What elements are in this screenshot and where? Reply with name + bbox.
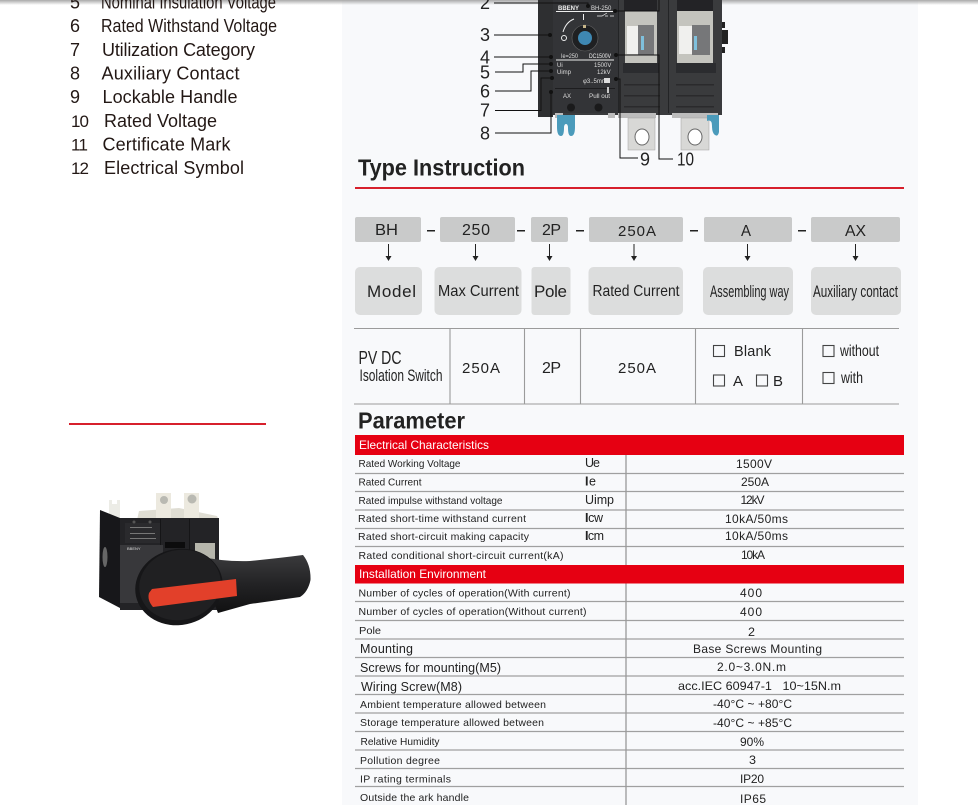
heading: Type Instruction: Type Instruction [358, 154, 525, 180]
front label plate: Ie=250 [561, 54, 579, 60]
panel: right column background [342, 0, 918, 805]
list: component legend: Rated Withstand Voltage [101, 16, 277, 36]
list: component legend: 6 [70, 16, 80, 36]
rows: installation environment: Base Screws Mounting [693, 642, 822, 656]
front label plate: DC1500V [589, 54, 611, 60]
callout numbers: 8 [480, 124, 490, 144]
diagram: labelled switch front view [480, 0, 728, 170]
rows: electrical characteristics [358, 456, 788, 562]
divider: red rule under heading [355, 187, 904, 189]
rows: installation environment: Outside the ark handle [360, 792, 469, 804]
callout numbers: 6 [480, 82, 490, 102]
front label plate: Ui [557, 63, 563, 69]
list: component legend: Electrical Symbol [104, 158, 244, 178]
rows: installation environment: Mounting [360, 642, 413, 656]
rows: installation environment: -40°C ~ +85°C [713, 716, 792, 730]
list: component legend: 10 [71, 112, 89, 131]
front label plate: 12kV [597, 70, 611, 76]
rows: installation environment: Number of cycles of operation(With current) [358, 588, 570, 600]
callout numbers: 9 [640, 150, 650, 170]
model code boxes [355, 217, 900, 242]
rows: installation environment: 3 [749, 753, 756, 767]
rows: electrical characteristics: 12kV [740, 493, 764, 507]
front label plate: BBENY [558, 6, 579, 12]
header: Installation Environment: Installation Environment [359, 567, 487, 581]
model code boxes: BH [375, 222, 398, 239]
rows: installation environment: Relative Humidity [360, 736, 440, 748]
meaning boxes: Max Current [438, 283, 520, 300]
meaning boxes: Pole [534, 282, 567, 301]
header: Installation Environment [355, 565, 904, 584]
list: component legend: Certificate Mark [102, 134, 232, 154]
selection table: 2P [542, 360, 561, 377]
selection table: without [839, 343, 879, 360]
rows: electrical characteristics: 10kA/50ms [725, 529, 788, 543]
selection table: with [840, 370, 863, 387]
rows: installation environment: 400 [740, 586, 762, 600]
list: component legend: 12 [71, 159, 89, 178]
callout numbers [480, 0, 694, 170]
rows: electrical characteristics: Icm [585, 529, 604, 543]
list: component legend: Utilization Category [102, 40, 255, 60]
callout numbers: 7 [480, 100, 490, 120]
model code boxes: 250 [462, 222, 490, 239]
selection table: 250A [618, 360, 656, 377]
rows: installation environment: Pole [359, 625, 381, 637]
list: component legend: Auxiliary Contact [102, 64, 240, 84]
handle [128, 541, 311, 633]
divider: left red rule [69, 423, 266, 425]
dashes between code boxes [427, 230, 806, 232]
callout numbers: 5 [480, 62, 490, 82]
front label plate: φ3..5mm [583, 79, 607, 85]
rows: installation environment: acc.IEC 60947-1 10~15N.m [678, 679, 841, 693]
rows: electrical characteristics: Ie [585, 474, 596, 488]
list: component legend: 7 [70, 40, 80, 60]
model code boxes: 2P [542, 222, 561, 239]
list: component legend: Lockable Handle [102, 87, 238, 107]
rows: installation environment: Ambient temperature allowed between [360, 699, 546, 711]
list: component legend: 9 [70, 87, 80, 107]
front label plate: 1500V [594, 63, 611, 69]
rows: installation environment: 2 [748, 625, 755, 639]
callout leader lines [494, 0, 673, 159]
heading: Parameter: Parameter [358, 408, 465, 434]
rows: electrical characteristics: 10kA [741, 548, 765, 562]
callout numbers: 4 [480, 48, 490, 68]
callout numbers: 3 [480, 25, 490, 45]
rows: installation environment: IP20 [740, 772, 764, 786]
selection table: PV DC [358, 348, 402, 368]
meaning boxes [355, 267, 901, 315]
rows: installation environment: Screws for mounting(M5) [360, 661, 501, 675]
list: component legend: 11 [71, 136, 88, 154]
rows: installation environment: IP rating terminals [360, 774, 451, 786]
front label plate [555, 6, 615, 112]
rows: installation environment: Storage temperature allowed between [360, 717, 544, 729]
rows: installation environment: Number of cycles of operation(Without current) [358, 606, 586, 618]
rows: electrical characteristics: 250A [741, 475, 769, 489]
parameter table [355, 435, 904, 805]
selection table: Blank [734, 344, 772, 360]
image: isolation switch with rotary handle [99, 493, 311, 633]
rows: electrical characteristics: Rated Working Voltage [358, 458, 461, 470]
rows: electrical characteristics: Uimp [585, 493, 614, 507]
list: component legend: Rated Voltage [104, 111, 217, 131]
rows: electrical characteristics: 1500V [736, 457, 772, 471]
rows: installation environment: Wiring Screw(M8) [361, 680, 462, 694]
rows: installation environment: 90% [740, 735, 764, 749]
callout numbers: 10 [677, 150, 694, 170]
image: isolation switch with rotary handle: BBENY [127, 546, 141, 551]
meaning boxes: Auxiliary contact [813, 283, 898, 301]
front label plate: Uimp [557, 70, 572, 76]
selection table: B [773, 374, 783, 390]
front label plate: AX [563, 94, 571, 100]
rows: installation environment: Pollution degree [360, 755, 440, 767]
rows: electrical characteristics: Icw [585, 511, 604, 525]
selection table: 250A [462, 360, 500, 377]
rows: electrical characteristics: Rated Current [358, 476, 422, 488]
model code boxes: A [741, 223, 751, 240]
rows: electrical characteristics: Rated short-time withstand current [358, 513, 526, 525]
list: component legend: 8 [70, 64, 80, 84]
rows: electrical characteristics: 10kA/50ms [725, 512, 788, 526]
callout dots [548, 4, 618, 94]
front label plate: BH-250 [591, 6, 612, 12]
rows: installation environment [358, 586, 841, 805]
selection table [354, 328, 899, 404]
rows: installation environment: 2.0~3.0N.m [717, 660, 786, 674]
front label plate: Pull out [589, 94, 610, 100]
model code boxes: 250A [618, 223, 656, 240]
meaning boxes: Assembling way [710, 283, 789, 301]
rows: electrical characteristics: Ue [585, 456, 600, 470]
rows: installation environment: -40°C ~ +80°C [713, 697, 792, 711]
arrows from code to meaning [386, 244, 858, 261]
rows: electrical characteristics: Rated short-circuit making capacity [358, 531, 530, 543]
rows: electrical characteristics: Rated impulse withstand voltage [358, 495, 503, 507]
model code boxes: AX [845, 223, 866, 240]
header: Electrical Characteristics: Electrical Characteristics [359, 438, 489, 452]
list: component legend [70, 0, 277, 178]
meaning boxes: Rated Current [592, 283, 680, 300]
rows: installation environment: 400 [740, 605, 762, 619]
terminals [557, 115, 719, 150]
selection table: Isolation Switch [360, 367, 442, 385]
header: Electrical Characteristics [355, 435, 904, 455]
selection table: A [733, 374, 743, 390]
rows: electrical characteristics: Rated conditional short-circuit current(kA) [358, 550, 564, 562]
switch body [538, 0, 728, 118]
meaning boxes: Model [367, 282, 416, 301]
